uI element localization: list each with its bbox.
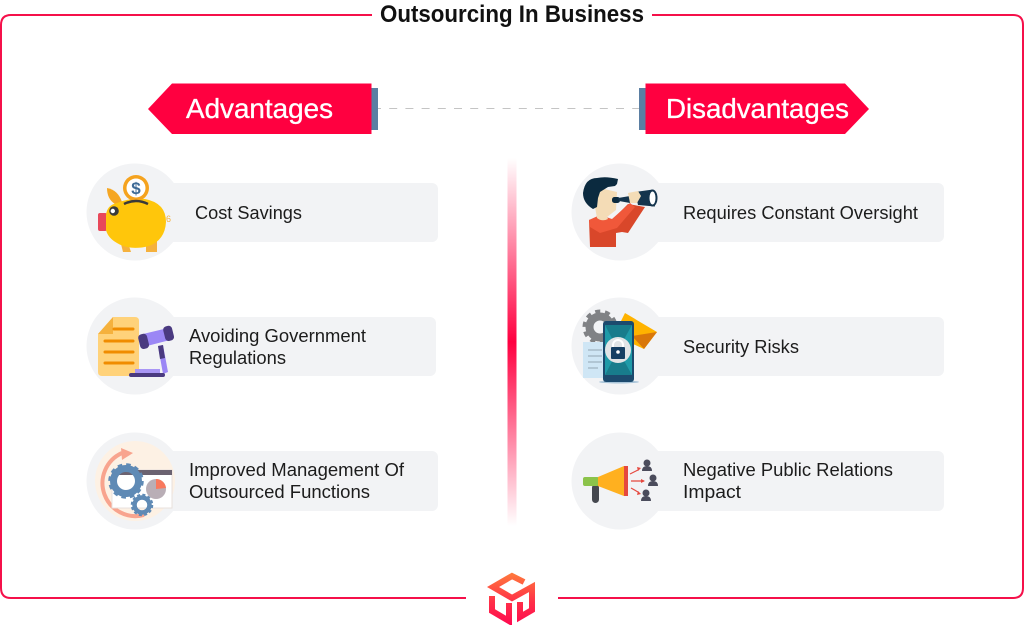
icon: document and gavel xyxy=(98,317,175,377)
heading: advantages xyxy=(148,84,378,134)
label xyxy=(189,460,405,502)
label: Negative Public Relations xyxy=(683,460,893,480)
panel: cost savings xyxy=(86,164,438,260)
icon: piggy bank: 6 xyxy=(166,214,171,224)
panel: requires constant oversight xyxy=(572,164,944,260)
panel: avoiding government regulations xyxy=(86,298,436,394)
label: Requires Constant Oversight xyxy=(683,203,918,223)
icon: megaphone and people xyxy=(583,460,658,503)
label: Avoiding Government xyxy=(189,326,366,346)
label: Cost Savings xyxy=(195,203,302,223)
heading: advantages: Advantages xyxy=(186,93,333,124)
icon: piggy bank: $ xyxy=(131,179,141,198)
label xyxy=(683,460,893,502)
title: Outsourcing In Business xyxy=(380,1,644,28)
icon: gears and dashboard xyxy=(95,441,175,521)
label: Security Risks xyxy=(683,337,799,357)
label: Regulations xyxy=(189,348,286,368)
panel: improved management xyxy=(86,432,438,530)
label: Improved Management Of xyxy=(189,460,405,480)
label: Outsourced Functions xyxy=(189,482,370,502)
label xyxy=(189,326,366,368)
panel: negative public relations impact xyxy=(572,432,944,530)
panel: security risks xyxy=(572,298,944,394)
heading: disadvantages xyxy=(639,84,869,134)
logo xyxy=(492,576,532,621)
centre divider xyxy=(508,158,516,526)
connector between headings xyxy=(378,108,639,110)
icon: piggy bank xyxy=(98,175,171,252)
heading: disadvantages: Disadvantages xyxy=(666,93,849,124)
icon: phone with padlock xyxy=(583,312,657,384)
icon: man with telescope xyxy=(583,177,658,247)
label: Impact xyxy=(683,482,741,502)
